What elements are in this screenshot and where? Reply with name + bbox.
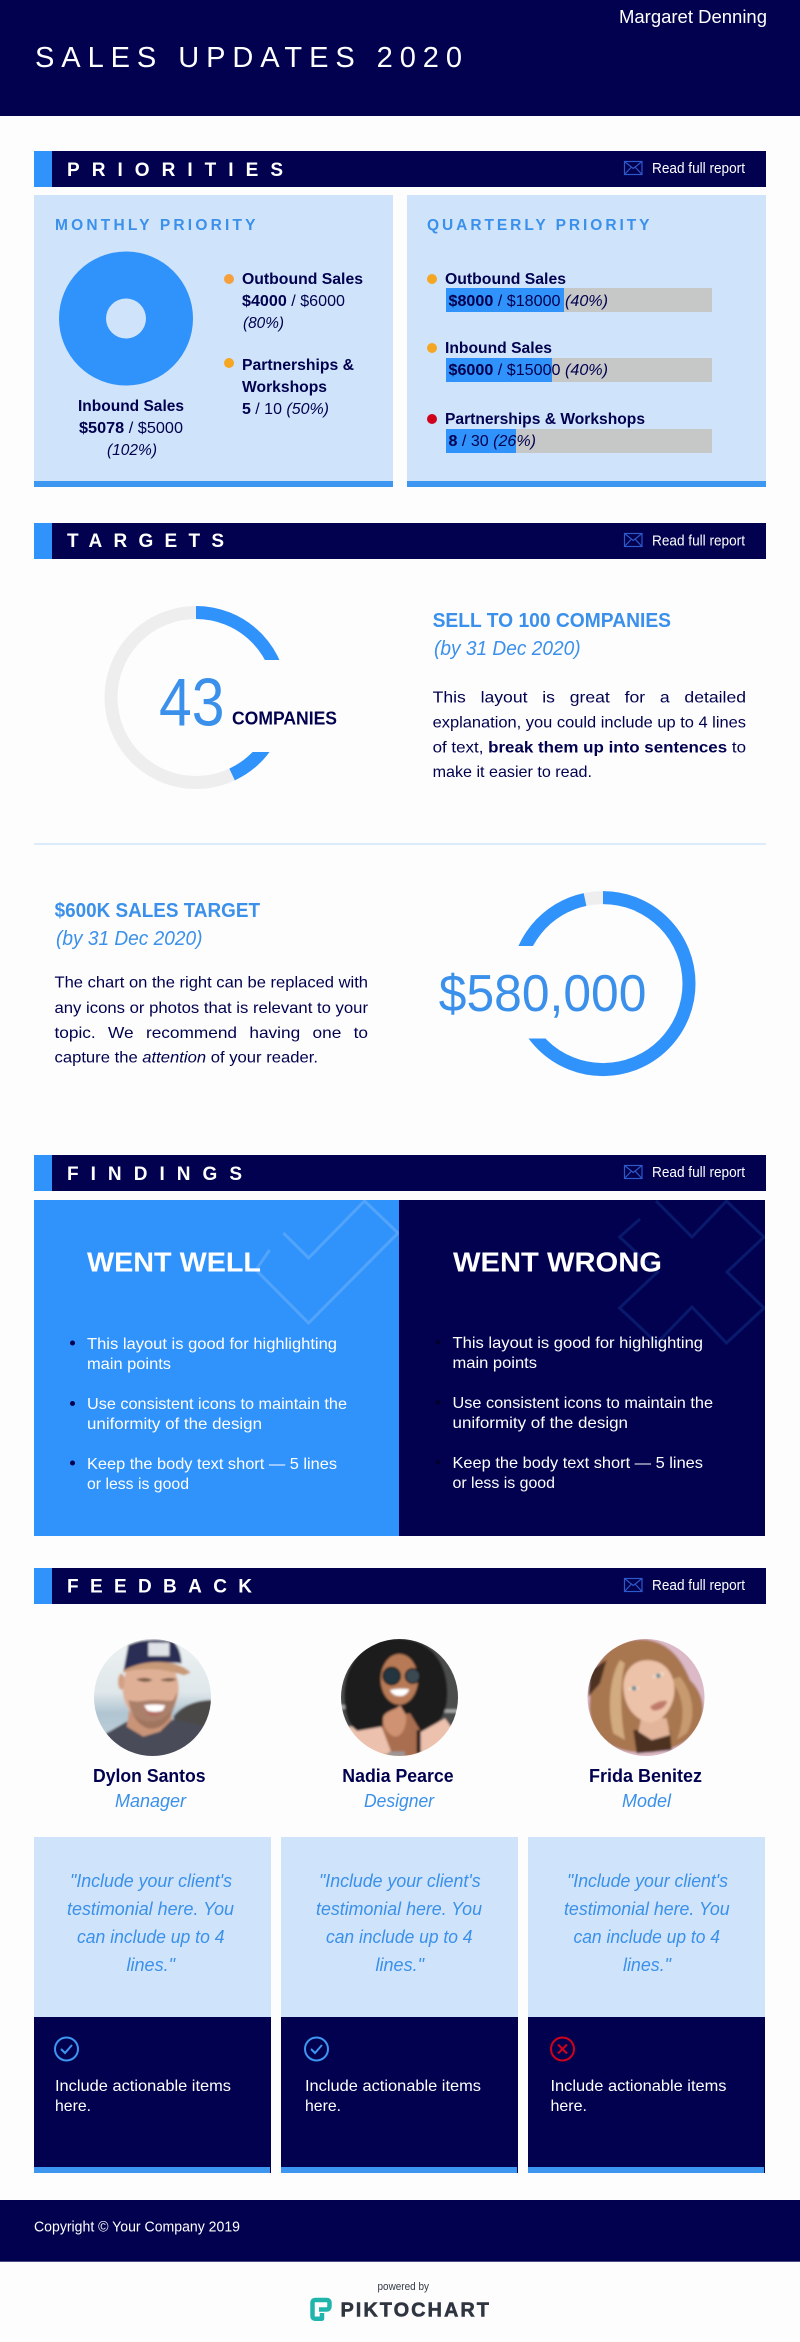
legend: outbound sales: Outbound Sales bbox=[242, 271, 363, 288]
progress: outbound sales: $8000 / $18000 (40%) bbox=[448, 293, 608, 310]
heading: targets: TARGETS bbox=[67, 531, 233, 552]
unit: companies: COMPANIES bbox=[232, 709, 337, 729]
photo: Frida Benitez bbox=[588, 1639, 704, 1756]
list: went well items: Use consistent icons to maintain the bbox=[87, 1396, 347, 1413]
legend: partnerships: Partnerships & bbox=[242, 357, 354, 374]
list: went wrong items: main points bbox=[452, 1355, 537, 1372]
link: read full report: Read full report bbox=[652, 534, 745, 550]
heading: went wrong: WENT WRONG bbox=[453, 1247, 662, 1278]
action text: here. bbox=[305, 2098, 341, 2115]
person: Dylon Santos: Manager bbox=[115, 1791, 187, 1811]
list: went wrong items: or less is good bbox=[452, 1475, 555, 1492]
text block: sales target: The chart on the right can be replaced with bbox=[54, 974, 368, 992]
action text: Include actionable items bbox=[550, 2078, 726, 2095]
progress: outbound sales: Outbound Sales bbox=[445, 271, 566, 288]
person: Frida Benitez: Frida Benitez bbox=[589, 1766, 702, 1786]
value: 43: 43 bbox=[159, 664, 224, 740]
heading: went well: WENT WELL bbox=[87, 1247, 261, 1278]
icon: envelope bbox=[624, 1166, 642, 1178]
testimonial card 2: can include up to 4 bbox=[326, 1927, 472, 1947]
testimonial card 1 bbox=[34, 1837, 271, 2017]
text block: sales target: topic. We recommend having one to bbox=[54, 1025, 368, 1042]
section bar: targets bbox=[34, 523, 766, 559]
heading: feedback: FEEDBACK bbox=[67, 1577, 261, 1598]
footer band bbox=[0, 2200, 800, 2262]
legend: partnerships: Workshops bbox=[242, 379, 327, 396]
list: went well items: or less is good bbox=[87, 1476, 189, 1493]
testimonial card 3: can include up to 4 bbox=[574, 1927, 720, 1947]
testimonial card 3: "Include your client's bbox=[567, 1871, 728, 1891]
testimonial card 1: testimonial here. You bbox=[67, 1899, 234, 1919]
icon: envelope bbox=[624, 534, 642, 546]
donut label: inbound sales bbox=[78, 398, 184, 459]
panel: quarterly priority bbox=[407, 195, 766, 487]
action card 3 bbox=[528, 2017, 765, 2173]
section bar: findings bbox=[34, 1155, 766, 1191]
person: Nadia Pearce: Nadia Pearce bbox=[342, 1766, 454, 1786]
list: went wrong items: Use consistent icons to maintain the bbox=[452, 1395, 713, 1412]
action text: here. bbox=[550, 2098, 587, 2115]
wordmark: PIKTOCHART bbox=[340, 2300, 490, 2322]
person: Nadia Pearce bbox=[342, 1766, 454, 1811]
text block: sell to 100 companies: of text, break them up into sentences to bbox=[433, 739, 746, 756]
testimonial card 1: "Include your client's bbox=[70, 1871, 232, 1891]
testimonial card 2: testimonial here. You bbox=[316, 1899, 482, 1919]
legend: partnerships bbox=[224, 357, 354, 418]
heading: priorities: PRIORITIES bbox=[67, 160, 292, 181]
progress: partnerships and workshops: 8 / 30 (26%) bbox=[448, 433, 536, 450]
action text bbox=[550, 2078, 726, 2115]
list: went well items: main points bbox=[87, 1356, 171, 1373]
text block: sell to 100 companies: explanation, you could include up to 4 lines bbox=[433, 714, 746, 731]
value: 580,000: $580,000 bbox=[439, 965, 646, 1023]
person: Frida Benitez bbox=[589, 1766, 702, 1811]
heading: findings: FINDINGS bbox=[67, 1164, 251, 1185]
testimonial card 1: can include up to 4 bbox=[77, 1927, 224, 1947]
list: went wrong items: uniformity of the design bbox=[452, 1415, 628, 1432]
piktochart branding bbox=[312, 2281, 490, 2322]
testimonial card 2: "Include your client's bbox=[319, 1871, 481, 1891]
text block: sales target: any icons or photos that is relevant to your bbox=[54, 1000, 369, 1017]
photo: Nadia Pearce bbox=[341, 1639, 458, 1756]
progress: inbound sales: $6000 / $15000 (40%) bbox=[448, 362, 608, 379]
text block: sell to 100 companies bbox=[433, 610, 746, 781]
text block: sales target bbox=[54, 900, 369, 1067]
panel: monthly priority bbox=[34, 195, 393, 487]
icon: envelope bbox=[624, 1578, 642, 1592]
list: went wrong items bbox=[436, 1335, 713, 1492]
text block: sell to 100 companies: (by 31 Dec 2020) bbox=[434, 638, 581, 660]
text block: sell to 100 companies: This layout is great for a detailed bbox=[433, 690, 746, 706]
action text bbox=[55, 2078, 231, 2115]
list: went wrong items: This layout is good for highlighting bbox=[452, 1335, 703, 1352]
powered by: powered by bbox=[378, 2281, 429, 2293]
progress: partnerships and workshops: Partnerships & Workshops bbox=[445, 411, 645, 428]
link: read full report: Read full report bbox=[652, 161, 745, 177]
legend: outbound sales: $4000 / $6000 bbox=[242, 293, 345, 310]
person: Dylon Santos: Dylon Santos bbox=[93, 1766, 206, 1786]
text block: sell to 100 companies: SELL TO 100 COMPANIES bbox=[433, 610, 671, 632]
photo: Dylon Santos bbox=[94, 1639, 211, 1756]
text block: sales target: $600K SALES TARGET bbox=[55, 900, 260, 922]
section bar: feedback bbox=[34, 1568, 766, 1604]
list: went wrong items: Keep the body text short — 5 lines bbox=[452, 1455, 703, 1472]
progress: inbound sales: Inbound Sales bbox=[445, 340, 552, 357]
action text: Include actionable items bbox=[305, 2078, 481, 2095]
panel: went wrong bbox=[399, 1200, 765, 1536]
person: Nadia Pearce: Designer bbox=[364, 1791, 435, 1811]
action card 1 bbox=[34, 2017, 271, 2173]
link: read full report: Read full report bbox=[652, 1165, 745, 1181]
donut label: inbound sales: Inbound Sales bbox=[78, 398, 184, 415]
watermark: check mark bbox=[256, 1201, 398, 1323]
legend: outbound sales: (80%) bbox=[243, 315, 284, 332]
radial chart: 580,000 bbox=[439, 898, 689, 1070]
legend: partnerships: 5 / 10 (50%) bbox=[242, 401, 329, 418]
icon: piktochart logo bbox=[312, 2300, 330, 2319]
action card 2 bbox=[281, 2017, 518, 2173]
testimonial card 2 bbox=[281, 1837, 518, 2017]
radial chart: 43 companies bbox=[111, 612, 337, 782]
header band bbox=[0, 0, 800, 116]
text block: sales target: capture the attention of your reader. bbox=[54, 1050, 318, 1067]
progress: inbound sales bbox=[427, 340, 712, 382]
testimonial card 2: lines." bbox=[376, 1955, 426, 1975]
testimonial card 3: lines." bbox=[623, 1955, 673, 1975]
link: read full report: Read full report bbox=[652, 1578, 745, 1594]
title: SALES UPDATES 2020 bbox=[35, 42, 468, 74]
icon: cross circle bbox=[551, 2038, 574, 2060]
text block: sales target: (by 31 Dec 2020) bbox=[56, 928, 202, 950]
testimonial card 3: testimonial here. You bbox=[564, 1899, 730, 1919]
text block: sell to 100 companies: make it easier to read. bbox=[433, 764, 592, 781]
panel heading: QUARTERLY PRIORITY bbox=[427, 217, 652, 234]
list: went well items: Keep the body text short — 5 lines bbox=[87, 1456, 337, 1473]
list: went well items: This layout is good for highlighting bbox=[87, 1336, 337, 1353]
icon: check circle bbox=[55, 2038, 78, 2060]
copyright: Copyright © Your Company 2019 bbox=[34, 2219, 240, 2236]
icon: envelope bbox=[624, 162, 642, 174]
person: Frida Benitez: Model bbox=[622, 1791, 672, 1811]
watermark: cross bbox=[620, 1201, 764, 1343]
action text: Include actionable items bbox=[55, 2078, 231, 2095]
action text bbox=[305, 2078, 481, 2115]
donut label: inbound sales: (102%) bbox=[107, 442, 157, 459]
progress: partnerships and workshops bbox=[427, 411, 712, 453]
person: Dylon Santos bbox=[93, 1766, 206, 1811]
panel heading: MONTHLY PRIORITY bbox=[55, 217, 258, 234]
testimonial card 1: lines." bbox=[126, 1955, 177, 1975]
section bar: priorities bbox=[34, 151, 766, 187]
donut label: inbound sales: $5078 / $5000 bbox=[79, 420, 183, 437]
list: went well items bbox=[70, 1336, 347, 1493]
testimonial card 3 bbox=[528, 1837, 765, 2017]
donut chart bbox=[59, 252, 193, 386]
icon: check circle bbox=[305, 2038, 328, 2060]
legend: outbound sales bbox=[224, 271, 363, 332]
panel: went well bbox=[34, 1200, 399, 1536]
author name: Margaret Denning bbox=[619, 7, 767, 27]
progress: outbound sales bbox=[427, 271, 712, 312]
list: went well items: uniformity of the design bbox=[87, 1416, 262, 1433]
action text: here. bbox=[55, 2098, 91, 2115]
